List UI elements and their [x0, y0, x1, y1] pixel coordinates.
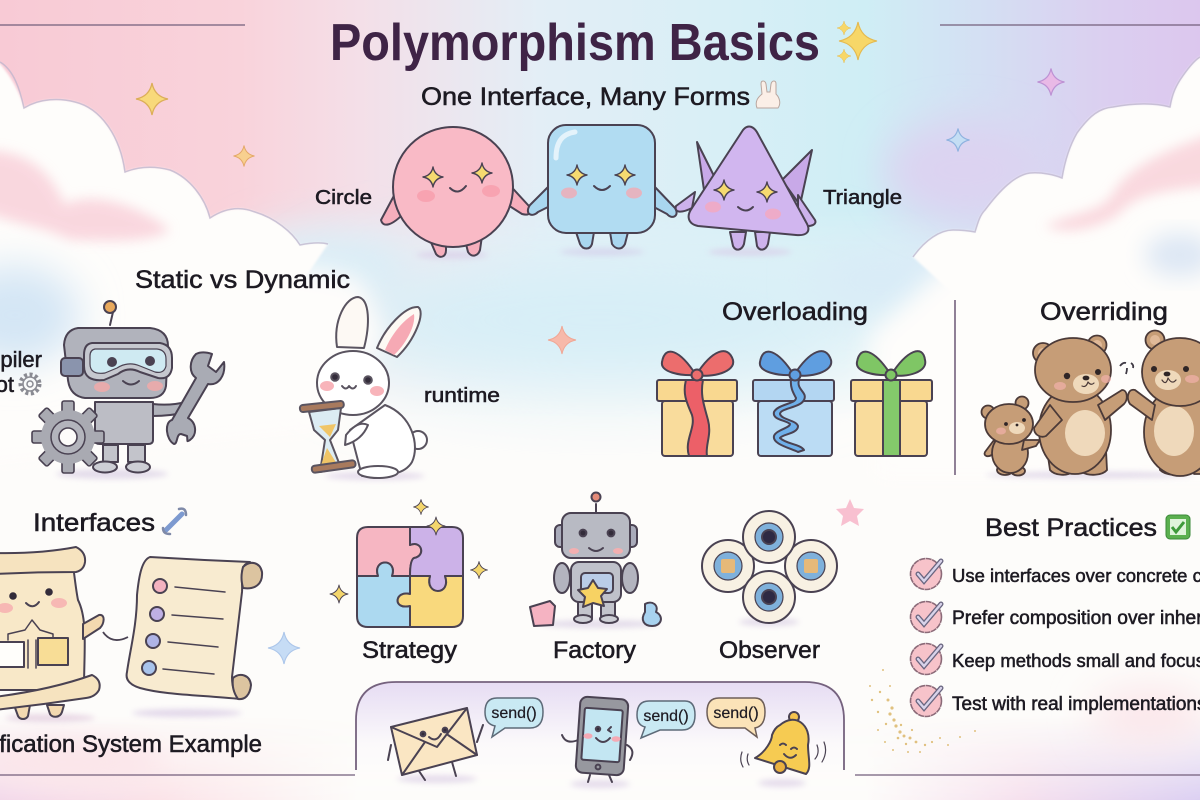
check item 2: [910, 602, 1200, 632]
character: square: [528, 125, 677, 256]
check item 4: Test with real implementations: [952, 694, 1200, 715]
icon: hourglass: [300, 401, 356, 473]
character: factory robot: [530, 492, 661, 628]
icon: green gift: [851, 351, 932, 456]
icon: bunny ears: [756, 81, 780, 108]
character: triangle: [676, 127, 815, 256]
label: Circle: Circle: [315, 187, 372, 209]
right bear: [1128, 330, 1200, 476]
icon: red gift: [657, 351, 737, 456]
decorative sparkles: [136, 68, 1064, 664]
label: Compiler Robot: [0, 347, 42, 397]
callout: bell send: send(): [713, 705, 759, 722]
check item 3: [910, 644, 1200, 674]
title: Polymorphism Basics: [330, 14, 820, 72]
callout: envelope send: [485, 698, 543, 737]
big bear: [1033, 336, 1127, 475]
label: Strategy: Strategy: [362, 637, 457, 664]
character: runtime rabbit: [300, 297, 427, 480]
label: Factory: Factory: [553, 637, 636, 664]
label: runtime: runtime: [424, 385, 500, 407]
best practices list: [910, 558, 1200, 716]
heading: Best Practices: Best Practices: [985, 514, 1157, 542]
icon: blue gift: [753, 351, 834, 456]
icon: green check box: [1166, 515, 1190, 539]
heading: Overloading: Overloading: [722, 298, 868, 326]
callout: phone send: send(): [643, 708, 689, 725]
character: compiler robot: [32, 301, 224, 479]
character: circle: [381, 127, 531, 259]
icon: observer eyes: [702, 511, 837, 626]
label: Observer: Observer: [719, 637, 820, 664]
callout: envelope send: send(): [491, 705, 537, 722]
icon: blue wrench: [163, 509, 186, 534]
icon: right scroll checklist: [127, 557, 262, 717]
heading: Static vs Dynamic: Static vs Dynamic: [135, 266, 350, 294]
character: envelope: [388, 708, 483, 783]
character: bears: [982, 330, 1200, 478]
left cloud: [0, 50, 385, 470]
connector: [103, 632, 128, 640]
icon: pink block: [530, 601, 555, 626]
divider: [954, 300, 956, 475]
icon: gear: [32, 401, 104, 473]
icon: title sparkles: [837, 21, 877, 63]
check item 4: [910, 686, 1200, 716]
callout: bell send: [707, 698, 765, 737]
character: phone: [562, 696, 632, 788]
icon: blue block: [643, 603, 661, 626]
subtitle: One Interface, Many Forms: [421, 83, 750, 111]
panel: notification system: [356, 682, 844, 788]
small bear: [982, 396, 1040, 476]
icon: music notes: [1120, 363, 1133, 374]
icon: wrench: [167, 352, 224, 444]
callout: phone send: [637, 701, 695, 738]
heading: Interfaces: Interfaces: [33, 509, 155, 537]
icon: left scroll character: [0, 547, 104, 722]
character: bell: [741, 712, 826, 787]
label: Triangle: Triangle: [823, 187, 902, 209]
gold dust: [869, 669, 976, 753]
right cloud: [870, 40, 1200, 480]
icon: small gear: [20, 374, 40, 394]
icon: strategy puzzle: [330, 500, 488, 627]
check item 1: [910, 558, 1200, 590]
heading: Overriding: Overriding: [1040, 298, 1168, 326]
